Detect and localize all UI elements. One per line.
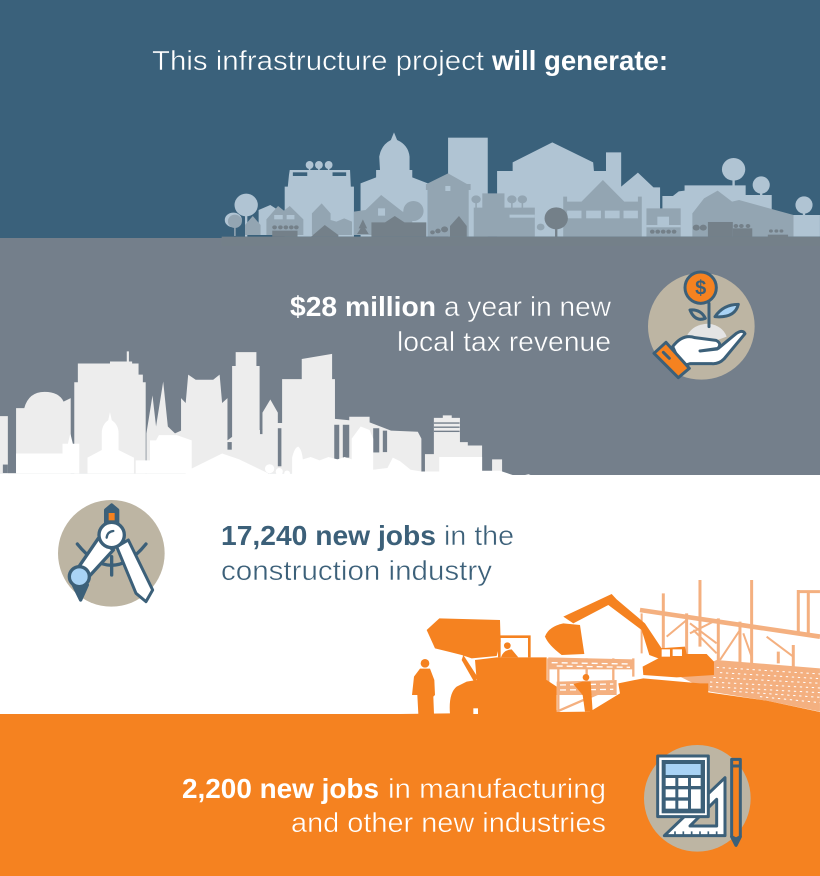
panel: grey tax revenue band xyxy=(0,238,820,476)
text: construction jobs: construction industry xyxy=(221,555,492,586)
panel: orange manufacturing band xyxy=(0,714,820,876)
text: tax revenue xyxy=(290,291,612,357)
illustration: small town skyline xyxy=(222,132,820,246)
text: manufacturing jobs: 2,200 new jobs xyxy=(182,773,379,804)
text: construction jobs: in the xyxy=(444,520,514,551)
panel: navy header band xyxy=(0,0,820,239)
text: construction jobs: 17,240 new jobs xyxy=(221,520,436,551)
text: manufacturing jobs xyxy=(182,773,606,838)
text: tax revenue: $28 million xyxy=(290,291,436,322)
text: tax revenue: local tax revenue xyxy=(397,326,611,357)
illustration: construction site silhouette xyxy=(400,580,820,714)
title xyxy=(152,45,668,76)
title: will generate: xyxy=(491,45,668,76)
title: This infrastructure project xyxy=(152,45,484,76)
icon: hand with plant and coin xyxy=(648,272,755,380)
panel: white construction band xyxy=(0,475,820,715)
text: construction jobs xyxy=(221,520,514,586)
text: manufacturing jobs: and other new industries xyxy=(291,807,606,838)
icon: calculator, set square and pencil xyxy=(644,745,751,852)
text: manufacturing jobs: in manufacturing xyxy=(388,773,606,804)
icon: drafting compass xyxy=(58,500,165,607)
icon: hand with plant and coin: $ xyxy=(695,277,706,299)
illustration: city skyline xyxy=(0,351,545,481)
text: tax revenue: a year in new xyxy=(444,291,612,322)
